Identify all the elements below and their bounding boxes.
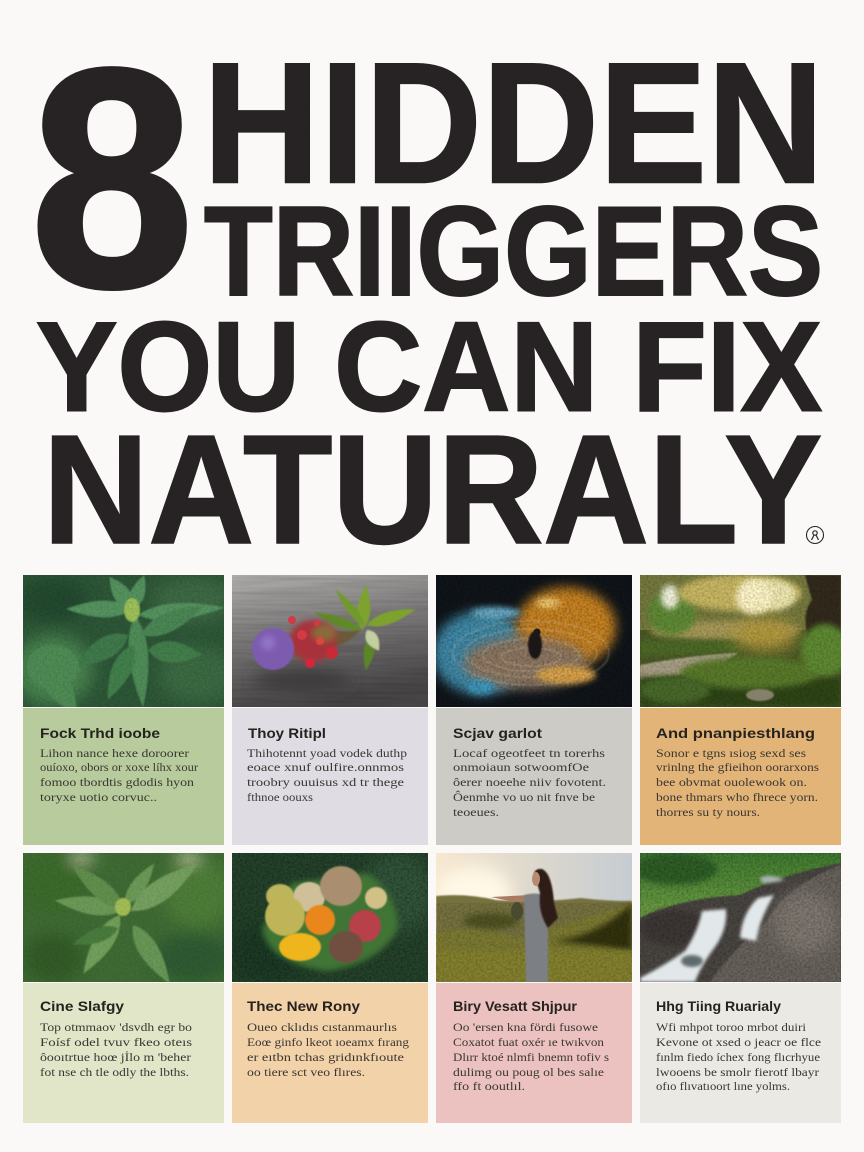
card 2 body: eoace xnuf oulfire.onnmos (247, 760, 404, 774)
card 1 body: fomoo tbordtis gdodis hyon (40, 775, 194, 789)
title: 8 Hidden Triggers You Can Fix Naturally: YOU CAN FIX (36, 296, 822, 438)
card 6 body: Oueo cklıdıs cıstanmaurlıs (247, 1020, 397, 1034)
card 7 body: Coxatot fuat oxér ıe twıkvon (453, 1035, 604, 1049)
card 7 body (453, 1020, 609, 1093)
card 4 body: bee obvmat ouolewook on. (656, 775, 807, 789)
panel: card 5 pale green leaves (18, 852, 233, 1123)
photo: swirling water with figure at sunset (436, 575, 632, 707)
card 8 body: Wfi mhpot toroo mrbot duiri (656, 1020, 807, 1034)
card 7 body: Oo 'ersen kna fördi fusowe (453, 1020, 598, 1034)
card 6 body: Eoœ ginfo lkeot ıoeamx fırang (247, 1035, 409, 1049)
card 5 text background (23, 983, 224, 1123)
card 3 body: onmoiaun sotwoomfOe (453, 760, 589, 774)
card 6 body: er eıtbn tchas gridınkfıoute (247, 1050, 404, 1064)
card 5 heading: Cine Slafgy (40, 998, 124, 1014)
panel: card 6 peach fruit (227, 853, 432, 1123)
photo: green herb plant (23, 575, 224, 707)
photo: sun through trees over a path (640, 575, 841, 707)
card 5 body: fot nse ch tle odly the lbths. (40, 1065, 189, 1079)
card 6 heading: Thec New Rony (247, 998, 360, 1014)
card 4 body (656, 746, 819, 819)
card 4 text background (640, 708, 841, 845)
panel: card 4 amber sunlit path (640, 575, 849, 845)
panel: card 8 off-white stream (633, 853, 841, 1123)
card 2 heading: Thoy Ritipl (248, 725, 326, 741)
card 3 body: ôerer noeehe niiv fovotent. (453, 775, 606, 789)
card 1 body: Lihon nance hexe doroorer (40, 746, 189, 760)
card 2 body: fthnoe oouxs (247, 790, 313, 804)
card 2 body: Thihotennt yoad vodek duthp (247, 746, 407, 760)
card 8 text background (640, 983, 841, 1123)
card 6 text background (232, 983, 428, 1123)
photo: fruits on green leaves (232, 853, 428, 982)
card 6 body (247, 1020, 409, 1079)
icon: registered mark (806, 526, 824, 544)
card 8 heading: Hhg Tiing Ruarialy (656, 998, 781, 1014)
card 3 body: teoeues. (453, 805, 499, 819)
card 1 text background (23, 708, 224, 845)
card 8 body: fınlm fiedo íchex fong flıcrhyue (656, 1050, 820, 1064)
card 8 body: Kevone ot xsed o jeacr oe flce (656, 1035, 821, 1049)
card 8 body (656, 1020, 821, 1093)
panel: card 1 green herb (13, 572, 238, 845)
card 4 body: Sonor e tgns ısiog sexd ses (656, 746, 806, 760)
card 3 body: Locaf ogeotfeet tn torerhs (453, 746, 605, 760)
card 8 body: ofıo flıvatıoort lıne yolms. (656, 1079, 790, 1093)
photo: flowers and leaves on slate (232, 575, 428, 707)
panel: card 7 pink woman on hill (436, 853, 632, 1123)
card 1 body (40, 746, 198, 804)
card 1 heading: Fock Trhd ioobe (40, 725, 160, 741)
card 8 body: lwooens be smolr fierotf lbayr (656, 1065, 819, 1079)
title: 8 Hidden Triggers You Can Fix Naturally: 8 (30, 5, 194, 353)
card 6 body: oo tiere sct veo flıres. (247, 1065, 365, 1079)
card 7 body: Dlırr ktoé nlmfi bnemn tofiv s (453, 1050, 609, 1064)
card 4 body: thorres su ty nours. (656, 805, 760, 819)
photo: broad green leaves (23, 853, 224, 982)
card 7 body: ffo ft ooutlıl. (453, 1079, 525, 1093)
card 4 body: vrinlng the gfieihon oorarxons (656, 760, 819, 774)
photo: woman on hillside at sunrise (436, 853, 632, 982)
photo: stream over rocks (640, 853, 841, 982)
card 4 heading: And pnanpiesthlang (656, 725, 815, 741)
card 5 body: Top otmmaov 'dsvdh egr bo (40, 1020, 192, 1034)
card 1 body: ouíoxo, obors or xoxe líhx xour (40, 760, 198, 774)
title: 8 Hidden Triggers You Can Fix Naturally: HIDDEN (203, 27, 824, 219)
card 2 text background (232, 708, 428, 845)
card 7 heading: Biry Vesatt Shjpur (453, 998, 578, 1014)
card 7 body: dulimg ou poug ol bes salıe (453, 1065, 604, 1079)
title: 8 Hidden Triggers You Can Fix Naturally: NATURALY (43, 403, 822, 576)
card 2 body (247, 746, 407, 804)
card 4 body: bone thmars who fhrece yorn. (656, 790, 818, 804)
card 5 body (40, 1020, 192, 1079)
card 7 text background (436, 983, 632, 1123)
title: 8 Hidden Triggers You Can Fix Naturally (30, 5, 824, 576)
card 3 body (453, 746, 606, 819)
card 3 text background (436, 708, 632, 845)
card 2 body: troobry ouuisus xd tr thege (247, 775, 404, 789)
card 5 body: ôooıtrtue hoœ jİlo m 'beher (40, 1050, 191, 1064)
panel: card 2 lilac flowers (232, 575, 428, 845)
card 3 body: Ôenmhe vo uo nit fnve be (453, 790, 595, 804)
panel: card 3 grey water (433, 575, 632, 845)
card 1 body: toryxe uotio corvuc.. (40, 790, 157, 804)
card 5 body: Foísf odel tvuv fkeo oteıs (40, 1035, 192, 1049)
card 3 heading: Scjav garlot (453, 725, 542, 741)
